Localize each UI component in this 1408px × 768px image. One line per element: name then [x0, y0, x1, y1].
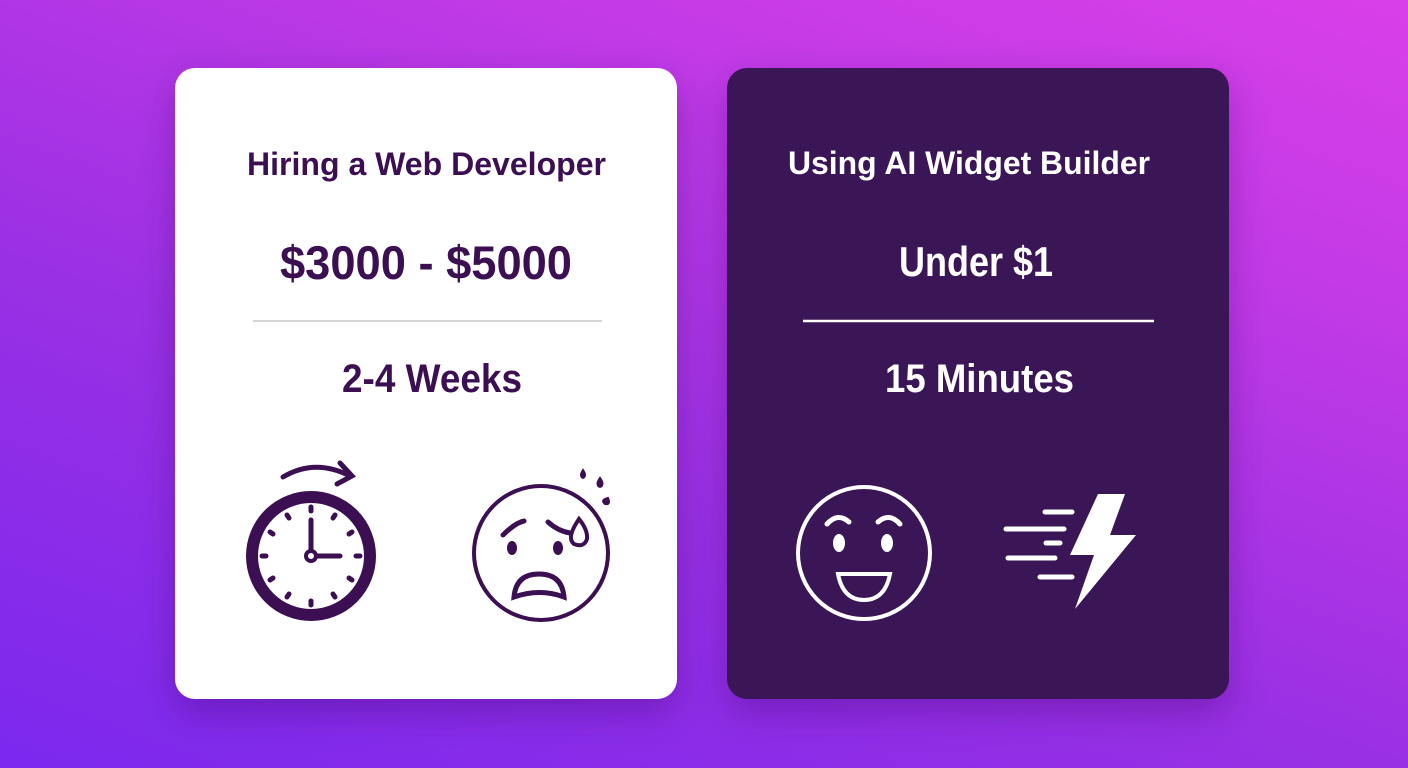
panel: AI widget builder: [727, 68, 1229, 699]
heading: hiring: Hiring a Web Developer: [247, 146, 606, 182]
icon: worried face: [474, 470, 609, 620]
heading: AI builder: Using AI Widget Builder: [788, 145, 1150, 181]
panel: hiring a web developer: [175, 68, 677, 699]
icon: happy face: [798, 487, 930, 619]
icon: clock with arrow: [252, 463, 370, 615]
price: AI: Under $1: [899, 238, 1053, 285]
price: developer: $3000 - $5000: [280, 236, 572, 289]
time: AI: 15 Minutes: [885, 357, 1074, 401]
time: developer: 2-4 Weeks: [342, 357, 522, 401]
icon: lightning bolt with speed lines: [1006, 494, 1136, 609]
